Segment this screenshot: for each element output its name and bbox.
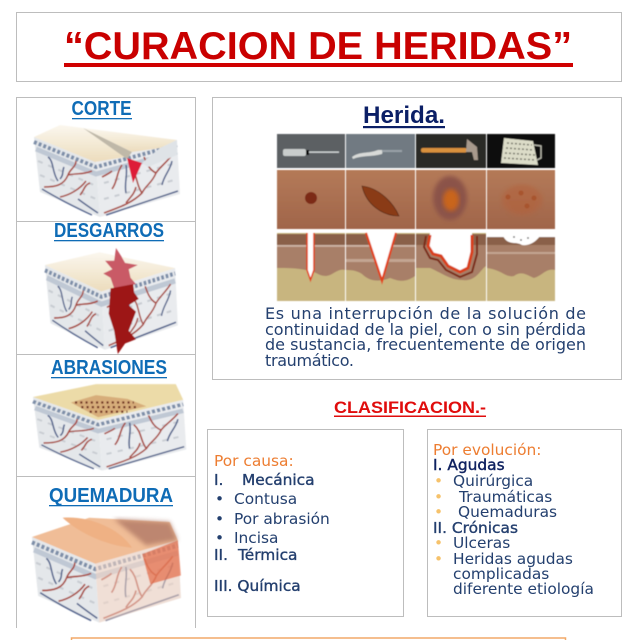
panel: por evolucion: • <box>434 472 443 490</box>
icon: martillo <box>416 134 486 168</box>
panel: por causa: III. Química <box>214 577 301 595</box>
illustration: desgarros <box>45 248 178 354</box>
text: definicion: continuidad de la piel, con o sin pérdida <box>265 320 586 339</box>
text: definicion: Es una interrupción de la solución de <box>265 304 586 323</box>
panel: por evolucion: Ulceras <box>453 534 510 552</box>
panel: por evolucion: diferente etiología <box>453 580 594 598</box>
heading: quemadura: QUEMADURA <box>49 485 173 507</box>
panel: por evolucion: • <box>434 503 443 521</box>
title panel <box>16 12 622 82</box>
illustration: corte <box>34 125 180 217</box>
panel: por evolucion <box>428 430 622 616</box>
panel: por evolucion: Quirúrgica <box>453 472 533 490</box>
title: “CURACION DE HERIDAS” <box>64 25 572 68</box>
panel: por evolucion: • <box>434 534 443 552</box>
text: definicion: de sustancia, frecuentemente de origen <box>265 335 586 354</box>
panel: por causa: • <box>215 510 224 528</box>
photo: piel contusa <box>416 170 486 229</box>
photo: piel abrasion <box>487 170 555 229</box>
panel: por causa <box>208 430 404 616</box>
heading: abrasiones: ABRASIONES <box>51 357 167 379</box>
diagram: corte punzante <box>277 233 345 301</box>
panel: por evolucion: Traumáticas <box>458 488 552 506</box>
photo: piel incisa <box>346 170 415 229</box>
photo: piel punzante <box>277 170 345 229</box>
heading: desgarros: DESGARROS <box>54 220 164 242</box>
heading: corte: CORTE <box>72 98 132 120</box>
icon: cuchillo <box>346 134 415 168</box>
panel: por causa: • <box>215 529 224 547</box>
text: definicion: traumático. <box>265 351 354 370</box>
panel: por evolucion: II. Crónicas <box>433 519 518 537</box>
panel: por evolucion: • <box>434 550 443 568</box>
heading: herida: Herida. <box>363 102 445 129</box>
panel: por evolucion: Por evolución: <box>433 441 542 459</box>
panel: recuadro inferior <box>72 638 566 640</box>
diagram: abrasion <box>487 233 555 301</box>
panel: por causa: Contusa <box>234 490 297 508</box>
illustration: quemadura <box>32 518 181 623</box>
panel: por causa: I. <box>214 471 223 489</box>
panel: por evolucion: • <box>434 488 443 506</box>
illustration: abrasiones <box>33 384 186 471</box>
panel: por evolucion: Heridas agudas <box>453 550 573 568</box>
panel: por causa: Incisa <box>234 529 278 547</box>
diagram: herida contusa <box>416 233 486 301</box>
panel: por evolucion: complicadas <box>453 565 549 583</box>
heading: clasificacion: CLASIFICACION.- <box>334 399 486 417</box>
panel: por causa: II. <box>214 546 228 564</box>
panel: por evolucion: I. Agudas <box>433 456 505 474</box>
panel: herida <box>212 98 622 380</box>
panel: por causa: Mecánica <box>242 471 315 489</box>
icon: rallador <box>487 134 555 168</box>
image grid: tipos de lesion <box>277 134 555 301</box>
panel: por causa: Térmica <box>237 546 297 564</box>
panel: por evolucion: Quemaduras <box>458 503 557 521</box>
text: definicion <box>265 304 586 370</box>
panel: por causa: Por causa: <box>214 452 294 470</box>
panel: por causa: • <box>215 490 224 508</box>
panel: por causa: Por abrasión <box>234 510 330 528</box>
icon: punzon <box>277 134 345 168</box>
panel: tipos de herida <box>16 98 196 628</box>
diagram: corte inciso <box>346 233 415 301</box>
